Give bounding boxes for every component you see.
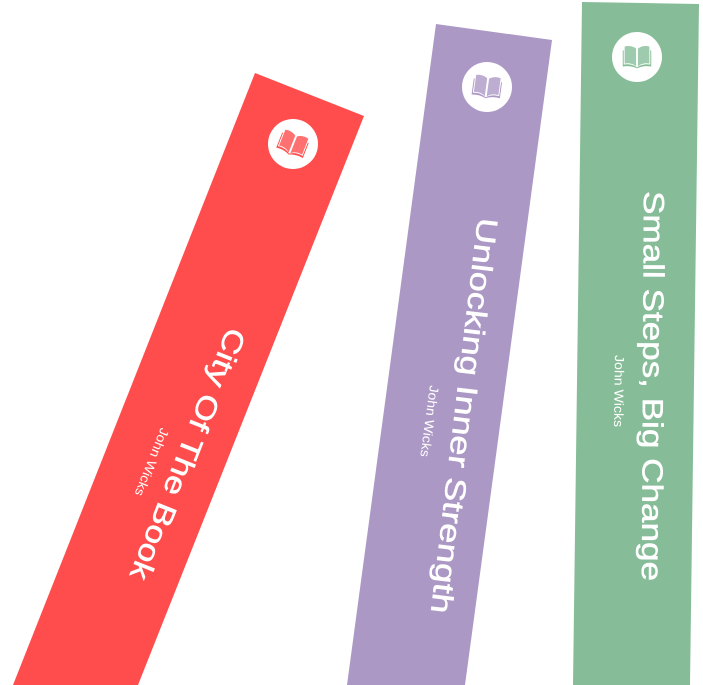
- red spine: [13, 73, 364, 685]
- author: John Wicks: John Wicks: [417, 385, 442, 458]
- book: City Of The Book: [13, 73, 364, 685]
- green spine: [573, 2, 699, 685]
- book: Unlocking Inner Strength: [347, 24, 552, 685]
- author: John Wicks: John Wicks: [132, 426, 172, 499]
- purple spine: [347, 24, 552, 685]
- title: Unlocking Inner Strength: Unlocking Inner Strength: [424, 216, 503, 615]
- icon: green book badge: [612, 32, 662, 82]
- book: Small Steps, Big Change: [573, 2, 699, 685]
- icon: purple book badge: [462, 62, 512, 112]
- title: City Of The Book: City Of The Book: [123, 323, 251, 585]
- author: John Wicks: John Wicks: [611, 355, 627, 428]
- title: Small Steps, Big Change: Small Steps, Big Change: [635, 191, 669, 581]
- icon: red book badge: [268, 119, 318, 169]
